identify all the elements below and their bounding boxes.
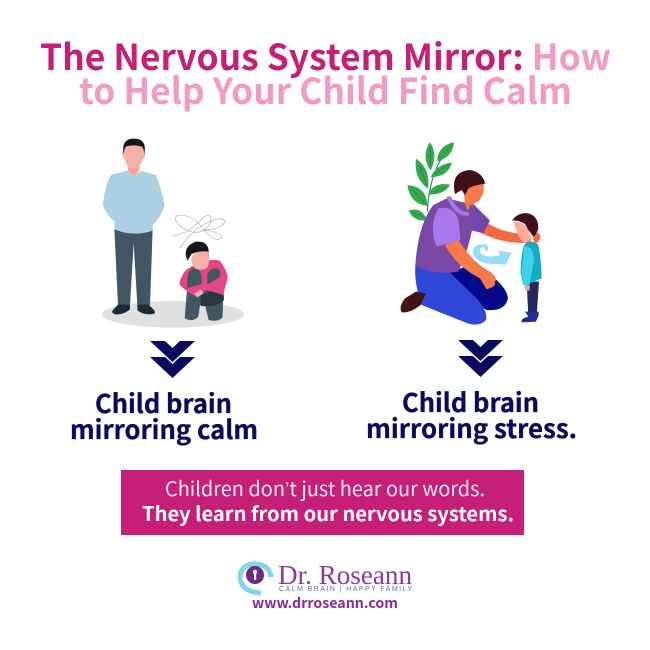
child: hair [512, 213, 538, 237]
icon: head with keyhole [240, 564, 271, 593]
tagline: CALM BRAIN | HAPPY FAMILY [279, 586, 412, 593]
child: knees [187, 268, 220, 288]
child: scribble thoughts [173, 215, 225, 248]
logo [240, 560, 413, 613]
left caption: mirroring calm [70, 410, 258, 447]
parent: torso [415, 198, 475, 273]
left caption [70, 384, 258, 447]
child: hand [194, 289, 203, 297]
man: shoes [112, 305, 155, 314]
right caption: mirroring stress. [366, 409, 577, 446]
man: face [122, 143, 145, 169]
parent: near arm [445, 240, 496, 289]
parent: far arm [482, 223, 532, 243]
child: hand [524, 286, 530, 291]
child: face [514, 222, 532, 243]
child: sleeve [521, 246, 534, 286]
child: hair [186, 242, 209, 261]
right caption: Child brain [402, 383, 539, 420]
plant [407, 142, 454, 221]
illustration: calm father standing beside stressed child [102, 139, 244, 328]
parent: foot [401, 292, 426, 312]
title: to Help Your Child Find Calm [79, 63, 572, 115]
child: top [179, 260, 228, 297]
right chevrons [458, 340, 503, 377]
message banner: They learn from our nervous systems. [142, 498, 514, 527]
child: face [191, 248, 209, 270]
parent: sleeve [433, 208, 461, 247]
website: www.drroseann.com [252, 593, 398, 613]
parent: back leg [450, 263, 508, 310]
child: shoes [522, 312, 539, 322]
message banner: Children don’t just hear our words. [165, 473, 485, 502]
parent: neck and face [464, 183, 484, 211]
wordmark: Dr. Roseann [278, 560, 413, 590]
child: legs [185, 287, 223, 321]
man: sweater [103, 171, 165, 234]
parent: far sleeve [470, 204, 490, 233]
child: legs [527, 282, 539, 317]
ground shadow [102, 301, 244, 328]
parent: hair [454, 170, 485, 195]
breath arrow [473, 244, 512, 265]
illustration: kneeling parent comforting child [401, 142, 542, 325]
parent: front leg [415, 265, 486, 325]
left caption: Child brain [95, 384, 232, 421]
child: coat [521, 242, 542, 285]
right caption [366, 383, 577, 446]
title: The Nervous System Mirror: How [40, 29, 611, 81]
man: legs [114, 229, 153, 305]
title [40, 29, 611, 115]
man: hair [123, 139, 145, 154]
parent: hand on child's shoulder [533, 233, 540, 244]
child: seat shadow [201, 287, 224, 306]
message banner [121, 470, 524, 535]
parent: collar [447, 196, 469, 216]
left chevrons [150, 341, 195, 378]
man: neck [128, 163, 139, 175]
